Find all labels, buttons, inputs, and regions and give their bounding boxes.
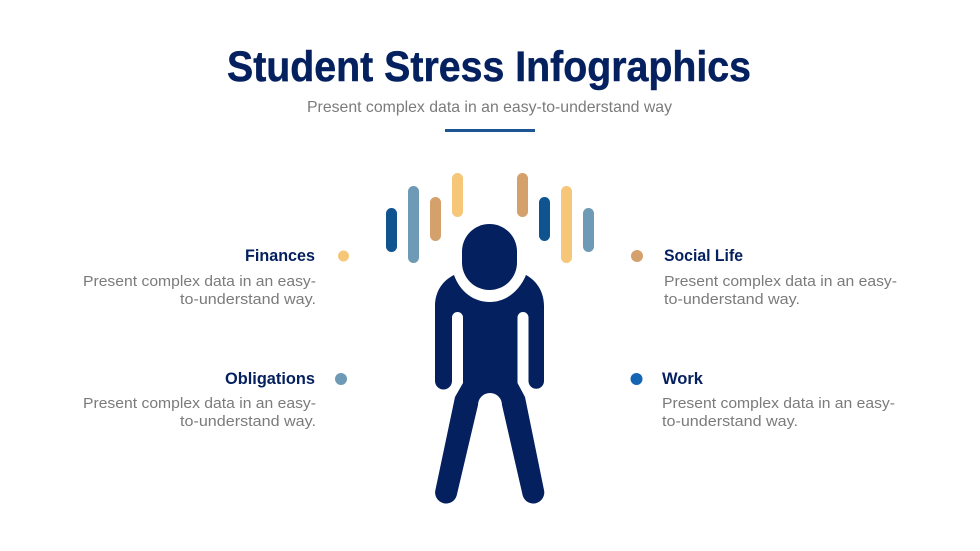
item: Finances [83,246,349,308]
item: Obligations: to-understand way. [180,413,316,430]
item: Social Life: Present complex data in an easy- [664,273,897,290]
item: Work: to-understand way. [662,413,798,430]
icon: student figure [435,224,544,504]
item: Social Life: to-understand way. [664,291,800,308]
title: Student Stress Infographics [227,43,751,91]
item: Social Life [631,246,897,308]
title underline [445,129,535,132]
item: Social Life: Social Life [664,246,743,265]
stress bars above head [386,173,594,263]
item: Obligations: Present complex data in an easy- [83,395,316,412]
item: Obligations: Obligations [225,369,315,388]
item: Work: Present complex data in an easy- [662,395,895,412]
item: Obligations [83,369,347,430]
item: Work [630,369,895,430]
item: Finances: to-understand way. [180,291,316,308]
item: Work: Work [662,369,704,388]
item: Finances: Finances [245,246,315,265]
item: Finances: Present complex data in an easy- [83,273,316,290]
subtitle: Present complex data in an easy-to-understand way [307,99,672,116]
